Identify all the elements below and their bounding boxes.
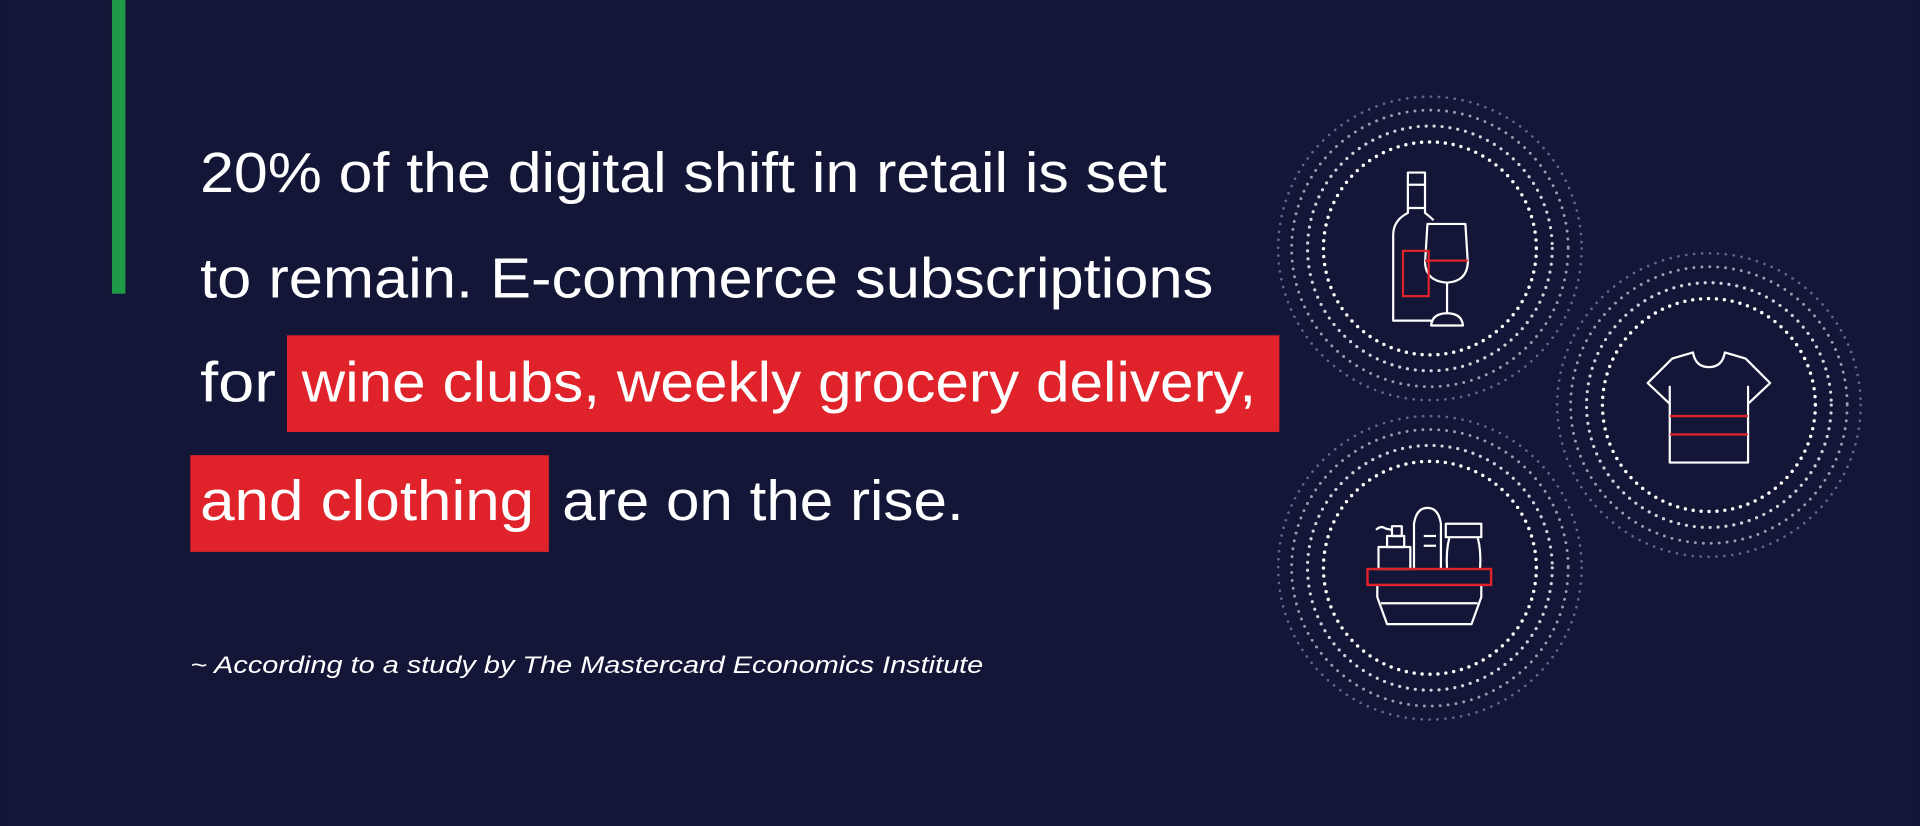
main statement text: to remain. E-commerce subscriptions — [200, 246, 1213, 309]
accent bar — [112, 0, 125, 294]
citation: ~ According to a study by The Mastercard Economics Institute — [190, 652, 983, 679]
main statement text: 20% of the digital shift in retail is set — [200, 141, 1167, 204]
highlight box 2 — [190, 455, 549, 552]
icon: wine circle — [1278, 97, 1582, 400]
highlight box 1 — [287, 335, 1279, 432]
icon: t-shirt circle — [1557, 253, 1861, 557]
main statement text: are on the rise. — [562, 469, 964, 532]
main statement text: wine clubs, weekly grocery delivery, — [301, 350, 1256, 413]
icon: grocery basket circle — [1278, 416, 1582, 720]
main statement text: for — [200, 350, 276, 413]
main statement text — [200, 141, 1256, 532]
main statement text: and clothing — [200, 469, 534, 532]
